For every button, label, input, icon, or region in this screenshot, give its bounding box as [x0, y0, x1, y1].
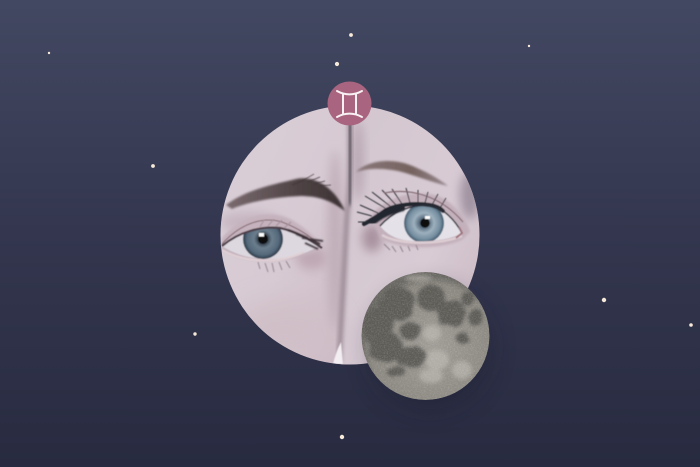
right eyebrow [356, 161, 448, 186]
moon maria [363, 285, 481, 377]
moon highlights [404, 275, 472, 383]
photo: twin faces in circle [215, 100, 485, 370]
left eyebrow [226, 174, 345, 211]
zodiac badge: Gemini [328, 82, 372, 126]
face shading [220, 120, 480, 360]
moon [362, 272, 490, 400]
moon shadow [368, 286, 492, 410]
left eye [222, 214, 323, 272]
left face skin [215, 100, 350, 370]
right face skin [340, 100, 485, 370]
icon: Gemini symbol [337, 91, 362, 117]
white notch [333, 342, 343, 364]
right eye [357, 188, 470, 252]
center seam [339, 118, 350, 364]
